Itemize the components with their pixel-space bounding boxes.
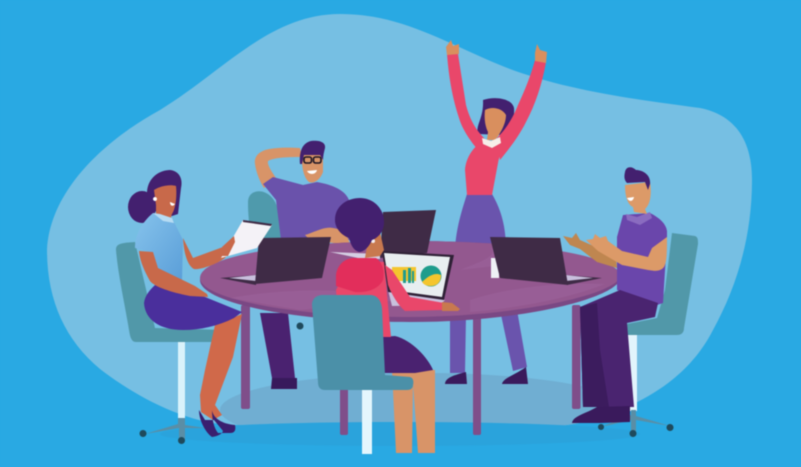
back chair wheel xyxy=(296,322,304,330)
back laptop base xyxy=(330,252,380,259)
back man right lens xyxy=(314,157,321,163)
standing woman torso xyxy=(465,141,503,195)
back man forearm xyxy=(305,228,350,245)
left woman earring and smile xyxy=(153,197,175,206)
back man left lens xyxy=(304,157,312,163)
table surface xyxy=(200,241,620,317)
back man smile xyxy=(307,170,317,174)
laptop: front xyxy=(382,251,454,306)
laptop: right xyxy=(490,237,602,285)
front woman hair xyxy=(335,198,384,252)
standing woman arms xyxy=(447,54,546,160)
back man legs xyxy=(260,313,295,378)
right man chair base xyxy=(601,410,670,433)
right man chair xyxy=(598,233,698,437)
front woman torso xyxy=(336,259,391,337)
left woman chair wheels xyxy=(140,430,185,444)
table rim xyxy=(200,241,620,322)
front laptop bezel xyxy=(382,251,454,300)
left woman back arm xyxy=(183,237,234,269)
left woman chair pole xyxy=(178,342,185,418)
left laptop screen xyxy=(255,237,331,284)
front woman hand xyxy=(442,302,460,311)
table highlights xyxy=(230,248,605,312)
back man chair xyxy=(248,191,281,240)
table leg back right xyxy=(572,305,580,409)
table leg front left xyxy=(340,385,348,435)
front laptop bar chart xyxy=(392,267,416,281)
front laptop screen xyxy=(384,253,450,297)
back man glasses xyxy=(304,157,321,163)
front chair xyxy=(312,295,413,454)
right man chair pole xyxy=(628,335,637,411)
front woman hood xyxy=(336,258,384,292)
back man face xyxy=(302,150,323,183)
left woman chair xyxy=(116,242,225,444)
left woman arm xyxy=(139,251,208,297)
right man chair wheels xyxy=(598,424,674,437)
table leg back left xyxy=(241,305,250,409)
standing woman trousers hips xyxy=(455,194,506,250)
paper held by left woman xyxy=(221,220,272,258)
front chair back and seat xyxy=(312,295,413,390)
back man shoe xyxy=(271,378,297,389)
left woman xyxy=(128,170,272,437)
left woman collar xyxy=(153,213,174,223)
standing woman xyxy=(445,40,547,384)
standing woman hair xyxy=(477,98,514,135)
left woman skirt xyxy=(144,285,242,330)
left woman shirt xyxy=(135,213,183,281)
back man xyxy=(255,141,350,389)
front chair pole xyxy=(362,390,372,454)
left woman hair xyxy=(147,170,182,216)
right man trousers xyxy=(580,290,658,407)
left laptop base xyxy=(220,275,256,285)
table legs xyxy=(241,305,580,435)
back man raised arm xyxy=(255,148,302,188)
front laptop base xyxy=(388,290,445,306)
standing woman trousers lower legs xyxy=(450,310,527,373)
right laptop base xyxy=(566,275,602,285)
floor shadow xyxy=(220,373,596,425)
standing woman shoes xyxy=(445,367,528,384)
standing woman face xyxy=(485,108,506,140)
left woman hand xyxy=(222,236,235,256)
front laptop pie slice xyxy=(422,274,441,286)
left woman chair base xyxy=(145,418,205,440)
right laptop keyboard xyxy=(566,275,593,281)
front woman xyxy=(335,198,460,453)
left woman legs xyxy=(200,314,242,420)
left woman shoes xyxy=(199,410,235,437)
right man chair back and seat xyxy=(627,233,698,335)
right man rear trouser leg xyxy=(580,303,609,407)
right man hair xyxy=(624,167,650,190)
front woman face xyxy=(365,228,384,258)
left woman face xyxy=(154,185,176,220)
right laptop screen xyxy=(490,237,568,285)
laptop: left xyxy=(220,237,331,285)
paper top edge xyxy=(243,220,272,226)
left woman hair bun xyxy=(128,191,156,223)
back laptop screen xyxy=(380,210,436,258)
right man back arm xyxy=(563,233,617,268)
right man front arm xyxy=(586,234,667,271)
front woman legs xyxy=(392,370,435,453)
right man xyxy=(563,167,667,423)
standing woman collar xyxy=(482,137,501,148)
front woman skirt xyxy=(380,336,433,373)
table leg front right xyxy=(473,316,481,435)
floor shadow below blob xyxy=(160,422,640,446)
back man hair xyxy=(300,141,325,164)
laptop: back xyxy=(330,210,436,259)
right man face xyxy=(625,182,651,214)
white paper on table xyxy=(491,258,499,278)
standing woman hands xyxy=(446,40,547,63)
front woman arm xyxy=(385,265,444,311)
right man collar xyxy=(626,212,652,225)
right man shirt xyxy=(617,213,667,305)
front laptop pie chart xyxy=(420,266,442,286)
back man shirt xyxy=(263,177,350,240)
table top xyxy=(200,241,620,322)
left laptop keyboard xyxy=(229,275,256,281)
front laptop bar highlights xyxy=(403,268,414,283)
left woman chair back and seat xyxy=(116,242,225,342)
right man smile xyxy=(627,197,634,201)
background blob xyxy=(47,14,752,429)
right man shoes xyxy=(572,406,630,423)
front woman earring xyxy=(371,239,375,243)
